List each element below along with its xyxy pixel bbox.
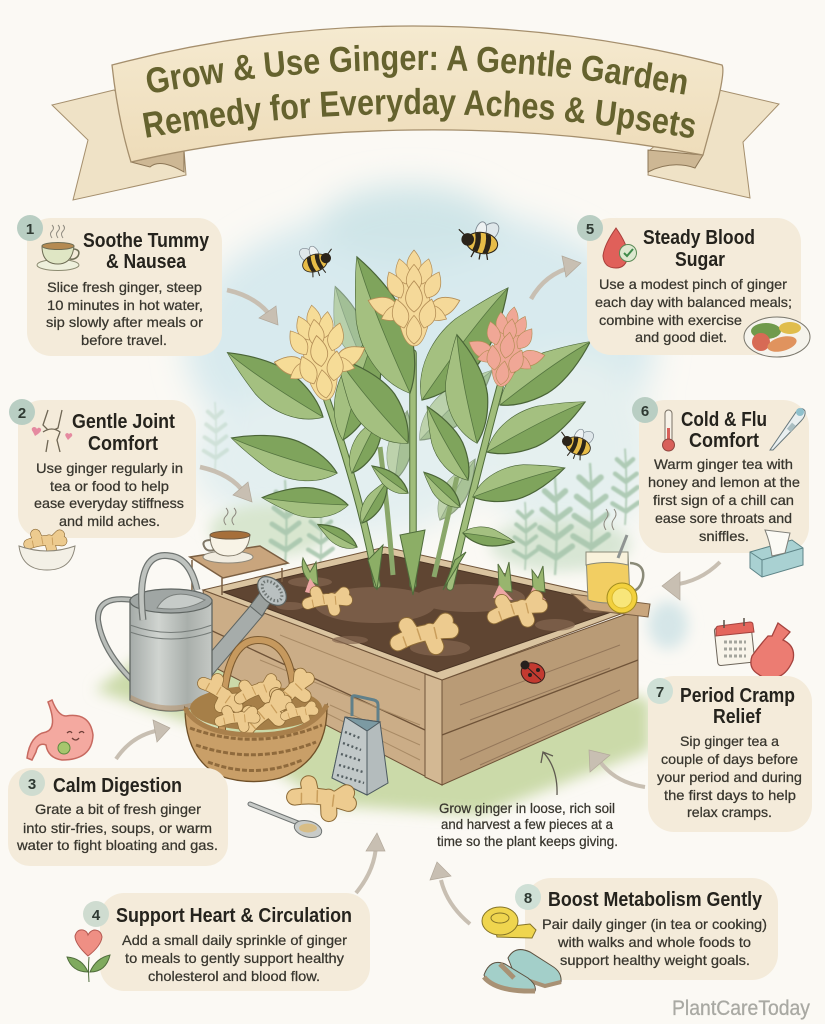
- icon: healthy plate: [744, 317, 810, 357]
- heading 7: Relief: [713, 706, 761, 728]
- ribbon main: [112, 26, 723, 162]
- body 7: relax cramps.: [687, 804, 772, 820]
- can body: [130, 600, 212, 711]
- body 7: your period and during: [657, 769, 802, 785]
- body 8: with walks and whole foods to: [557, 934, 751, 950]
- loose ginger root: [293, 781, 351, 817]
- panel 7: period cramp: [647, 676, 812, 832]
- right stem leaves: [414, 326, 600, 550]
- back stems: [380, 447, 457, 577]
- bee: right: [554, 420, 599, 464]
- heading 1: Soothe Tummy: [83, 230, 210, 252]
- bed left face: [203, 590, 442, 785]
- number 8: [515, 884, 541, 910]
- heading 1: & Nausea: [106, 251, 187, 273]
- body 6: honey and lemon at the: [648, 474, 800, 490]
- body 4: cholesterol and blood flow.: [148, 968, 320, 984]
- icon: ginger bowl: [19, 534, 75, 570]
- left ribbon tail: [52, 90, 186, 200]
- bed corner post: [425, 674, 442, 785]
- box grater: [332, 696, 388, 795]
- ginger in soil: center: [396, 619, 453, 652]
- basket handle: [222, 640, 293, 730]
- ladybug: [518, 659, 548, 687]
- body 1: Slice fresh ginger, steep: [47, 279, 202, 295]
- number 7: [647, 678, 673, 704]
- body 5: Use a modest pinch of ginger: [599, 276, 787, 292]
- bed rim: [203, 547, 645, 680]
- arrow 1: [227, 290, 278, 325]
- icon: hot water bottle: [751, 623, 794, 679]
- title text: Grow & Use Ginger: A Gentle Garden: [146, 44, 687, 94]
- number 4: 4: [92, 907, 101, 924]
- lemon: [607, 583, 637, 613]
- card 6: [639, 400, 809, 553]
- basket bowl: [185, 705, 327, 782]
- number 6: 6: [641, 403, 649, 420]
- watermark: PlantCareToday: [672, 997, 810, 1020]
- right ribbon tail: [648, 90, 779, 198]
- body 7: Sip ginger tea a: [680, 733, 779, 749]
- ground wash: [95, 504, 688, 815]
- heading 2: Comfort: [88, 433, 158, 455]
- heading 7: Period Cramp: [680, 685, 795, 707]
- back leaves: [322, 282, 503, 526]
- left stem leaves: [216, 322, 396, 554]
- body 3: Grate a bit of fresh ginger: [35, 801, 201, 817]
- measuring spoon: [250, 804, 324, 840]
- heading 3: Calm Digestion: [53, 775, 182, 797]
- heading 6: Comfort: [689, 430, 759, 452]
- teacup on stool: [203, 508, 253, 563]
- panel 2: joint comfort: [9, 399, 196, 570]
- icon: calendar: [714, 618, 755, 666]
- icon: running shoes: [484, 950, 561, 991]
- body 1: 10 minutes in hot water,: [47, 297, 203, 313]
- panel 4: heart and circulation: [67, 893, 370, 991]
- icon: tissue box: [750, 530, 803, 577]
- arrow 3: [116, 720, 170, 759]
- number 2: [9, 399, 35, 425]
- number 8: 8: [524, 890, 532, 907]
- panel 3: calm digestion: [8, 768, 228, 866]
- body 2: and mild aches.: [59, 513, 160, 529]
- can top handle: [142, 556, 197, 620]
- bee: left: [294, 237, 339, 281]
- body 2: ease everyday stiffness: [34, 495, 184, 511]
- card 8: [525, 878, 778, 980]
- flower: center cream: [365, 250, 463, 346]
- can spout: [204, 604, 264, 680]
- bee: top: [454, 214, 504, 263]
- number 6: [632, 397, 658, 423]
- arrow 5: [531, 256, 581, 299]
- card 5: [587, 218, 801, 355]
- body 2: tea or food to help: [50, 478, 169, 494]
- wooden shelf: [572, 594, 650, 617]
- small stool: [190, 546, 288, 595]
- number 2: 2: [18, 405, 26, 422]
- can rose: [250, 571, 292, 616]
- body 2: Use ginger regularly in: [36, 460, 183, 476]
- heading 4: Support Heart & Circulation: [116, 905, 352, 927]
- panel 1: soothe tummy: [17, 215, 222, 356]
- can back handle: [98, 599, 132, 680]
- body 1: sip slowly after meals or: [46, 314, 203, 330]
- heading 8: Boost Metabolism Gently: [548, 889, 763, 911]
- body 8: Pair daily ginger (in tea or cooking): [542, 916, 767, 932]
- body 6: first sign of a chill can: [653, 492, 794, 508]
- heading 6: Cold & Flu: [681, 409, 767, 431]
- garden caption: and harvest a few pieces at a: [441, 816, 613, 832]
- garden caption: Grow ginger in loose, rich soil: [439, 800, 615, 816]
- number 7: 7: [656, 684, 664, 701]
- background herbs: [204, 402, 639, 575]
- number 1: 1: [26, 221, 34, 238]
- title text line 2: Remedy for Everyday Aches & Upsets: [142, 88, 695, 138]
- ribbon folds: [131, 150, 703, 172]
- body 5: and good diet.: [635, 329, 727, 345]
- card 2: [18, 400, 196, 538]
- basket of ginger: [185, 640, 327, 782]
- arrow 8: [430, 862, 470, 924]
- card 1: [27, 218, 222, 356]
- body 5: each day with balanced meals;: [595, 294, 792, 310]
- body 8: support healthy weight goals.: [560, 952, 750, 968]
- heading 5: Sugar: [675, 249, 725, 271]
- arrow 6: [662, 562, 720, 600]
- icon: knee joint: [32, 410, 72, 452]
- arrow 7: [589, 750, 645, 787]
- center stem leaves: [320, 248, 526, 499]
- card 7: [648, 676, 812, 832]
- glass of lemon tea: [586, 509, 643, 603]
- panel 6: cold and flu: [632, 397, 809, 577]
- ginger in soil: right: [492, 562, 546, 625]
- callout arrows: [116, 256, 720, 924]
- number 3: 3: [28, 776, 36, 793]
- arrow center: [541, 752, 557, 795]
- body 1: before travel.: [81, 332, 167, 348]
- card 4: [100, 893, 370, 991]
- watering can: [98, 556, 292, 711]
- bed right face: [442, 610, 638, 785]
- number 5: [577, 215, 603, 241]
- number 5: 5: [586, 221, 594, 238]
- icon: digital thermometer: [770, 408, 805, 450]
- panel 5: blood sugar: [577, 215, 810, 357]
- icon: happy stomach: [27, 700, 93, 760]
- ginger plant: [216, 248, 600, 595]
- soil: [223, 554, 626, 672]
- icon: glass thermometer: [662, 410, 674, 451]
- icon: blood drop: [603, 228, 636, 268]
- body 6: sniffles.: [699, 528, 749, 544]
- body 6: ease sore throats and: [655, 510, 792, 526]
- heading 5: Steady Blood: [643, 227, 755, 249]
- body 7: the first days to help: [664, 787, 796, 803]
- stems: [327, 353, 500, 587]
- title banner: [51, 25, 780, 201]
- base sheaths: [368, 530, 466, 595]
- card 3: [8, 768, 228, 866]
- body 4: Add a small daily sprinkle of ginger: [122, 932, 347, 948]
- ginger in soil: left: [302, 558, 347, 610]
- panel 8: boost metabolism: [482, 878, 778, 991]
- flower: right pink: [460, 300, 555, 393]
- basket ginger pile: [190, 672, 322, 735]
- icon: teacup: [37, 225, 79, 270]
- body 3: water to fight bloating and gas.: [16, 837, 218, 853]
- body 6: Warm ginger tea with: [654, 456, 793, 472]
- body 4: to meals to gently support healthy: [125, 950, 344, 966]
- heading 2: Gentle Joint: [72, 411, 175, 433]
- flower: left yellow: [263, 298, 375, 408]
- body 5: combine with exercise: [599, 312, 742, 328]
- icon: heart flower: [67, 930, 110, 982]
- number 1: [17, 215, 43, 241]
- raised garden bed: [203, 547, 645, 785]
- garden caption: time so the plant keeps giving.: [437, 833, 618, 849]
- arrow 4: [356, 833, 385, 893]
- number 4: [83, 901, 109, 927]
- body 3: into stir-fries, soups, or warm: [23, 820, 212, 836]
- arrow 2: [200, 467, 252, 502]
- watercolor sky wash: [185, 185, 655, 545]
- number 3: [19, 770, 45, 796]
- icon: measuring tape: [482, 907, 536, 938]
- body 7: couple of days before: [661, 751, 798, 767]
